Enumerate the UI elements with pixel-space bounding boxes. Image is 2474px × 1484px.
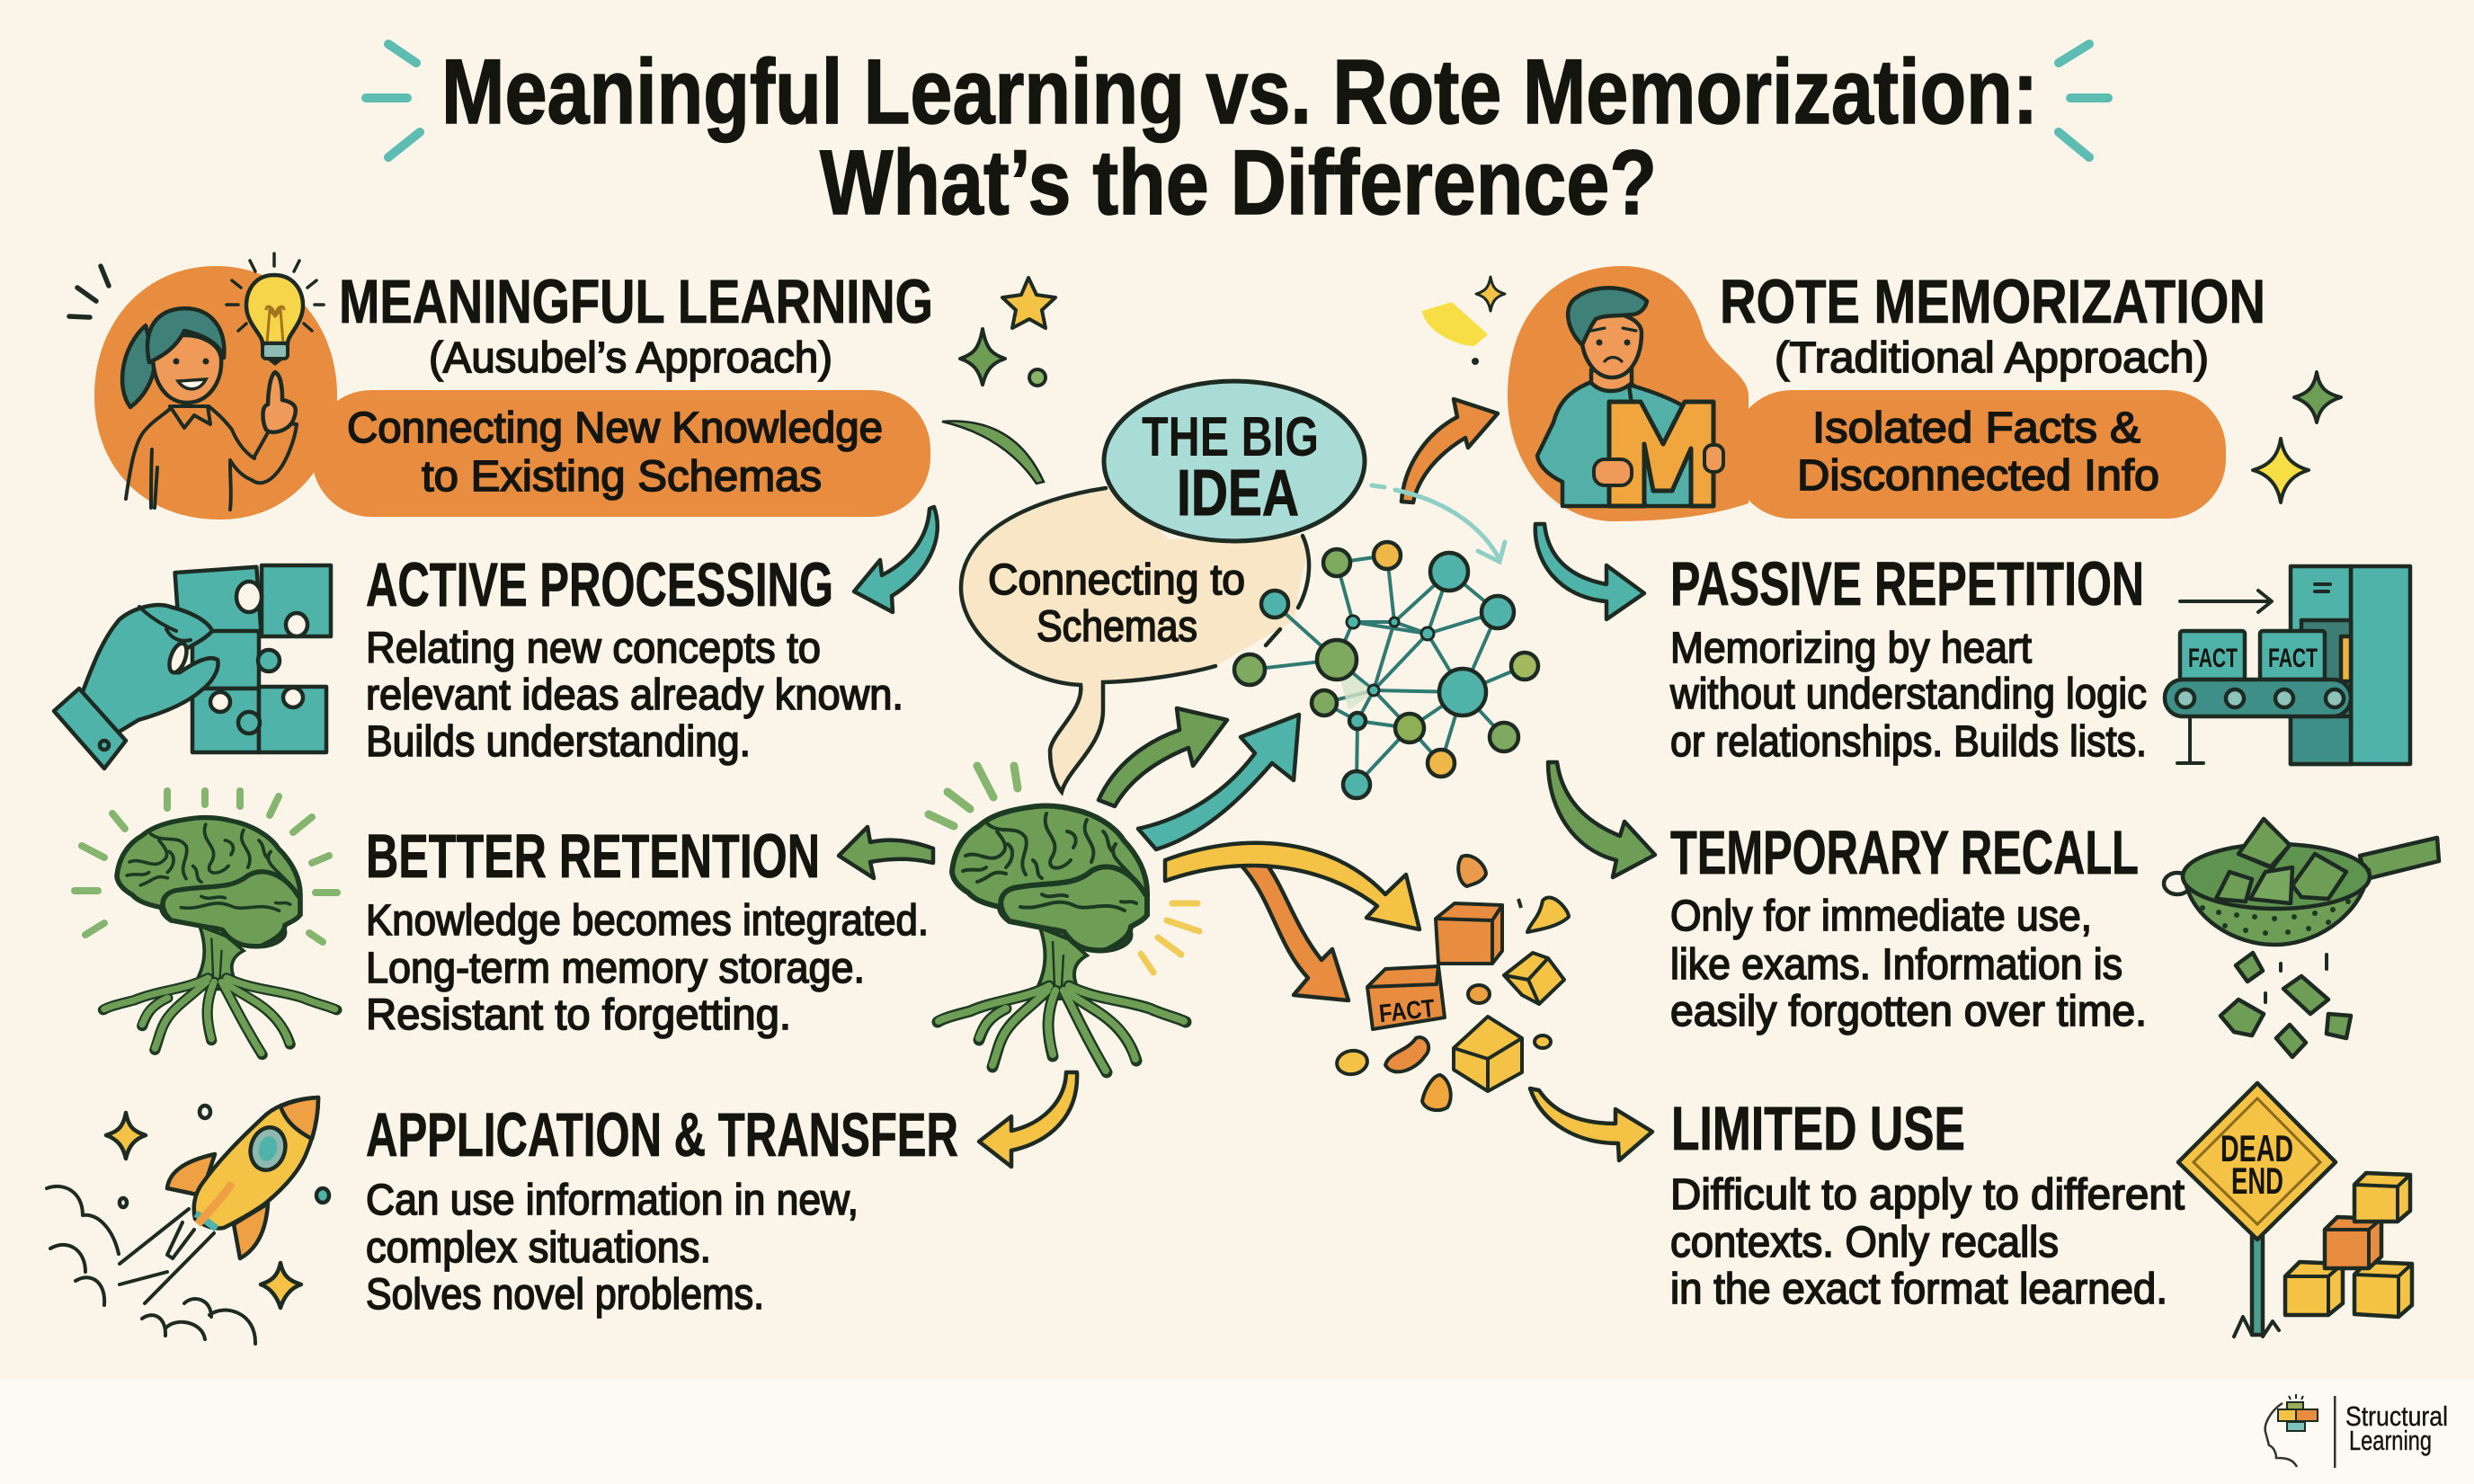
- title: What’s the Difference?: [820, 131, 1657, 234]
- description: Can use information in new,: [366, 1177, 859, 1224]
- panel: rote memorization header: [1508, 266, 2265, 521]
- pill text: to Existing Schemas: [422, 453, 822, 501]
- description: Difficult to apply to different: [1670, 1171, 2185, 1219]
- icon: fact machine: FACT: [2268, 644, 2318, 673]
- orange blob: [1508, 266, 1749, 521]
- center: the big idea ellipse: IDEA: [1177, 458, 1299, 529]
- decorative stars and sparkles: [960, 277, 2341, 502]
- arrow: to limited use: [1530, 1089, 1652, 1160]
- icon: light bulb: [227, 253, 324, 364]
- heading: APPLICATION & TRANSFER: [366, 1100, 958, 1169]
- description: complex situations.: [366, 1224, 711, 1272]
- center: the big idea ellipse: THE BIG: [1142, 406, 1319, 468]
- panel: temporary recall: [1670, 818, 2439, 1057]
- description: Only for immediate use,: [1670, 893, 2092, 940]
- logo text: [2345, 1400, 2448, 1456]
- logo: structural learning: [2265, 1394, 2448, 1468]
- description: Solves novel problems.: [366, 1271, 764, 1319]
- heading: ACTIVE PROCESSING: [366, 550, 833, 619]
- icon: central brain tree: [929, 766, 1199, 1072]
- orange pill: [1732, 390, 2226, 519]
- center: speech bubble connecting to schemas: [961, 485, 1309, 792]
- icon: broken fact fragments: [1335, 856, 1569, 1110]
- arrow: to temporary recall: [1548, 762, 1655, 877]
- panel: passive repetition: [1669, 549, 2410, 766]
- arrow: dashed teal to network: [1372, 485, 1505, 562]
- description: easily forgotten over time.: [1670, 988, 2147, 1035]
- footer strip: [0, 1379, 2474, 1484]
- icon: rocket: [47, 1097, 329, 1344]
- heading: TEMPORARY RECALL: [1670, 818, 2139, 887]
- icon: colander with falling cubes: [2164, 819, 2439, 1057]
- heading: ROTE MEMORIZATION: [1720, 267, 2265, 336]
- logo text: Structural: [2345, 1400, 2448, 1432]
- bubble text: [988, 556, 1245, 651]
- description: Builds understanding.: [366, 718, 751, 766]
- logo text: Learning: [2349, 1425, 2432, 1456]
- icon: fact machine: FACT: [2188, 644, 2238, 673]
- arrow: to rote memorization: [1402, 399, 1498, 502]
- person with idea: [122, 308, 297, 510]
- bubble text: Connecting to: [988, 556, 1245, 604]
- pill text: [1797, 404, 2159, 500]
- description: or relationships. Builds lists.: [1670, 718, 2147, 766]
- description: contexts. Only recalls: [1670, 1219, 2059, 1266]
- subtitle: (Ausubel’s Approach): [429, 334, 832, 382]
- description: Long-term memory storage.: [366, 945, 865, 992]
- description: Relating new concepts to: [366, 625, 821, 672]
- title accent rays: [366, 44, 2108, 157]
- bubble text: Schemas: [1037, 603, 1197, 651]
- pill text: Disconnected Info: [1797, 452, 2159, 500]
- orange blob: [94, 266, 337, 520]
- description: [366, 897, 929, 1039]
- arrow: to better retention: [839, 827, 933, 878]
- icon: dead end sign with blocks: [2178, 1083, 2412, 1337]
- logo mark: [2265, 1394, 2318, 1467]
- description: [366, 1177, 859, 1319]
- description: without understanding logic: [1669, 671, 2147, 718]
- arrow: green to network: [1099, 708, 1227, 806]
- panel: application and transfer: [47, 1097, 958, 1344]
- description: [1669, 625, 2147, 766]
- icon: dead end sign with blocks: END: [2231, 1160, 2283, 1202]
- pill text: [347, 404, 883, 501]
- panel: meaningful learning header: [69, 253, 933, 520]
- subtitle: (Traditional Approach): [1775, 334, 2209, 382]
- pill text: Isolated Facts &: [1812, 404, 2140, 452]
- icon: broken fact fragments: FACT: [1377, 994, 1436, 1027]
- panel: active processing: [54, 550, 903, 769]
- icon: dead end sign with blocks: DEAD: [2220, 1127, 2293, 1169]
- arrow: to application and transfer: [979, 1072, 1077, 1167]
- person holding letter M: [1537, 288, 1723, 506]
- heading: MEANINGFUL LEARNING: [339, 267, 933, 336]
- description: Memorizing by heart: [1670, 625, 2032, 672]
- idea rays: [69, 266, 109, 317]
- description: Resistant to forgetting.: [366, 991, 791, 1039]
- title: Meaningful Learning vs. Rote Memorization:: [441, 40, 2038, 143]
- title: [441, 40, 2038, 234]
- pill text: Connecting New Knowledge: [347, 404, 883, 452]
- heading: LIMITED USE: [1671, 1094, 1965, 1163]
- description: [366, 625, 903, 766]
- description: Knowledge becomes integrated.: [366, 897, 929, 945]
- description: [1670, 1171, 2185, 1313]
- heading: BETTER RETENTION: [366, 822, 820, 891]
- description: like exams. Information is: [1670, 941, 2122, 989]
- panel: better retention: [75, 791, 929, 1054]
- orange pill: [312, 390, 930, 517]
- icon: brain tree: [75, 791, 337, 1054]
- arrow: yellow to fragments: [1165, 843, 1419, 929]
- arrow: green crescent to big idea: [942, 422, 1044, 484]
- center: the big idea ellipse: [1104, 381, 1365, 541]
- panel: limited use: [1670, 1083, 2412, 1337]
- arrow: orange to fragments: [1241, 863, 1348, 1000]
- arrow: teal to network: [1138, 715, 1299, 849]
- description: relevant ideas already known.: [366, 671, 903, 719]
- icon: fact machine: [2165, 566, 2410, 764]
- description: in the exact format learned.: [1670, 1266, 2167, 1313]
- heading: PASSIVE REPETITION: [1670, 549, 2144, 618]
- arrow: to passive repetition: [1535, 524, 1644, 619]
- icon: schema network: [1234, 542, 1538, 798]
- description: [1670, 893, 2147, 1035]
- icon: puzzle and hand: [54, 565, 331, 769]
- arrow: to active processing: [854, 507, 938, 612]
